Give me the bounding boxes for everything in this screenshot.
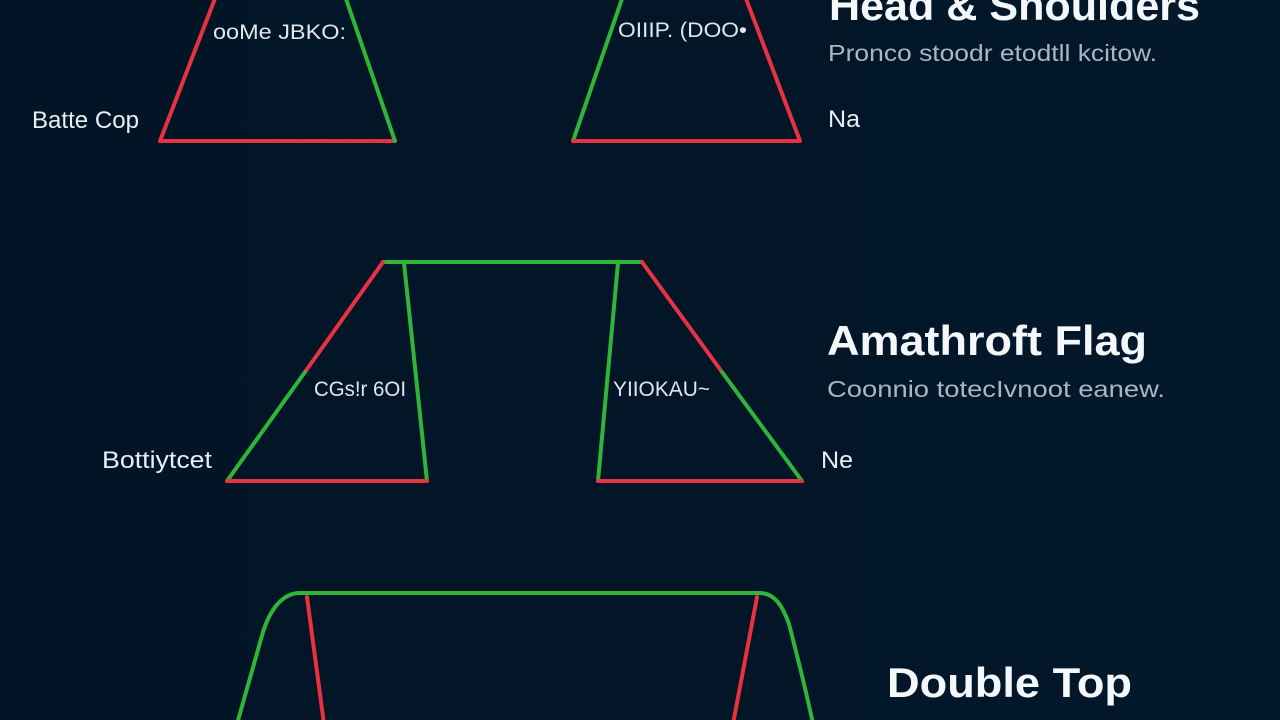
- label: right trapezoid inner text: YIIOKAU~: [613, 378, 710, 401]
- description: flag: Coonnio totecIvnoot eanew.: [827, 376, 1165, 402]
- chart: first pattern right trapezoid: [573, 0, 800, 141]
- label: left trapezoid side text: Batte Cop: [32, 107, 139, 134]
- chart: second pattern trapezoids: [227, 262, 802, 481]
- heading: Double Top: Double Top: [887, 659, 1132, 706]
- label: right side text: Na: [828, 106, 861, 133]
- heading: Amathroft Flag: Amathroft Flag: [827, 317, 1147, 364]
- label: left trapezoid side text: Bottiytcet: [102, 447, 212, 474]
- chart: third pattern curve and lines: [237, 593, 813, 720]
- panel: flag pattern: [102, 262, 1165, 481]
- panel: head and shoulders pattern: [32, 0, 1200, 141]
- description: head and shoulders: Pronco stoodr etodtll kcitow.: [828, 40, 1157, 66]
- label: right trapezoid inner text: OIIIP. (DOO•: [618, 19, 747, 42]
- chart: first pattern left trapezoid: [160, 0, 395, 141]
- label: left trapezoid inner text: CGs!r 6OI: [314, 378, 406, 401]
- label: right side text: Ne: [821, 447, 853, 474]
- panel: double top pattern: [237, 593, 1132, 720]
- label: left trapezoid inner text: ooMe JBKO:: [213, 21, 346, 44]
